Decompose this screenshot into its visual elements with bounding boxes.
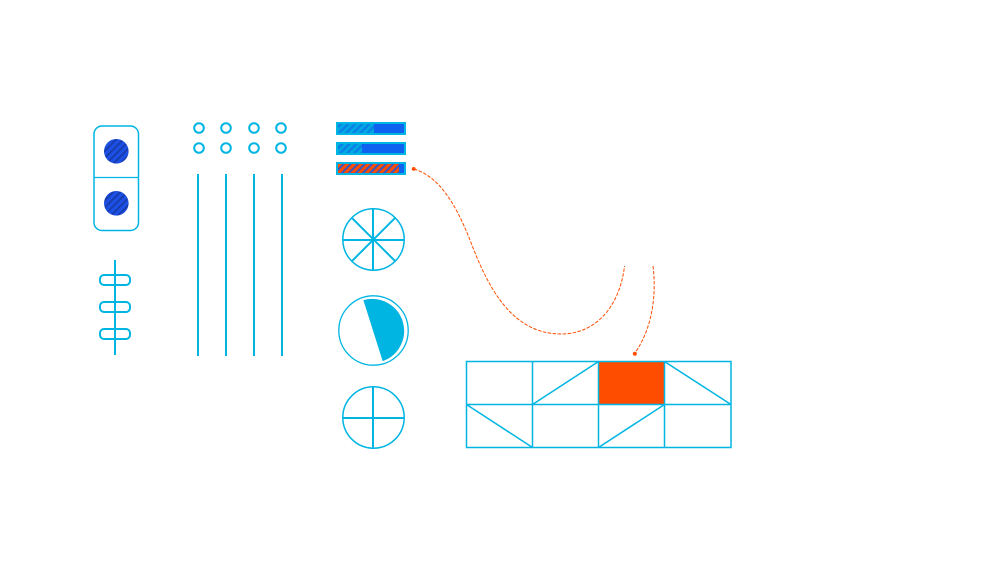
triangle grid (466, 362, 731, 448)
icon: spine with three pills (100, 260, 130, 355)
bar 1 (337, 123, 405, 134)
panel: domino card (94, 126, 138, 230)
highlighted cell (598, 362, 664, 404)
pie: four segments (343, 387, 404, 448)
pie: filled wedge (339, 296, 408, 365)
icon: top hatched circle (104, 139, 129, 164)
bar 3 (337, 163, 405, 174)
bar 2 (337, 143, 405, 154)
dot grid (194, 123, 286, 153)
dashed connector: bar to curve (412, 167, 624, 334)
vertical lines (198, 174, 282, 356)
pie: eight segments (343, 209, 404, 270)
dashed connector: curve to grid cell (633, 266, 654, 356)
icon: bottom hatched circle (104, 191, 129, 216)
